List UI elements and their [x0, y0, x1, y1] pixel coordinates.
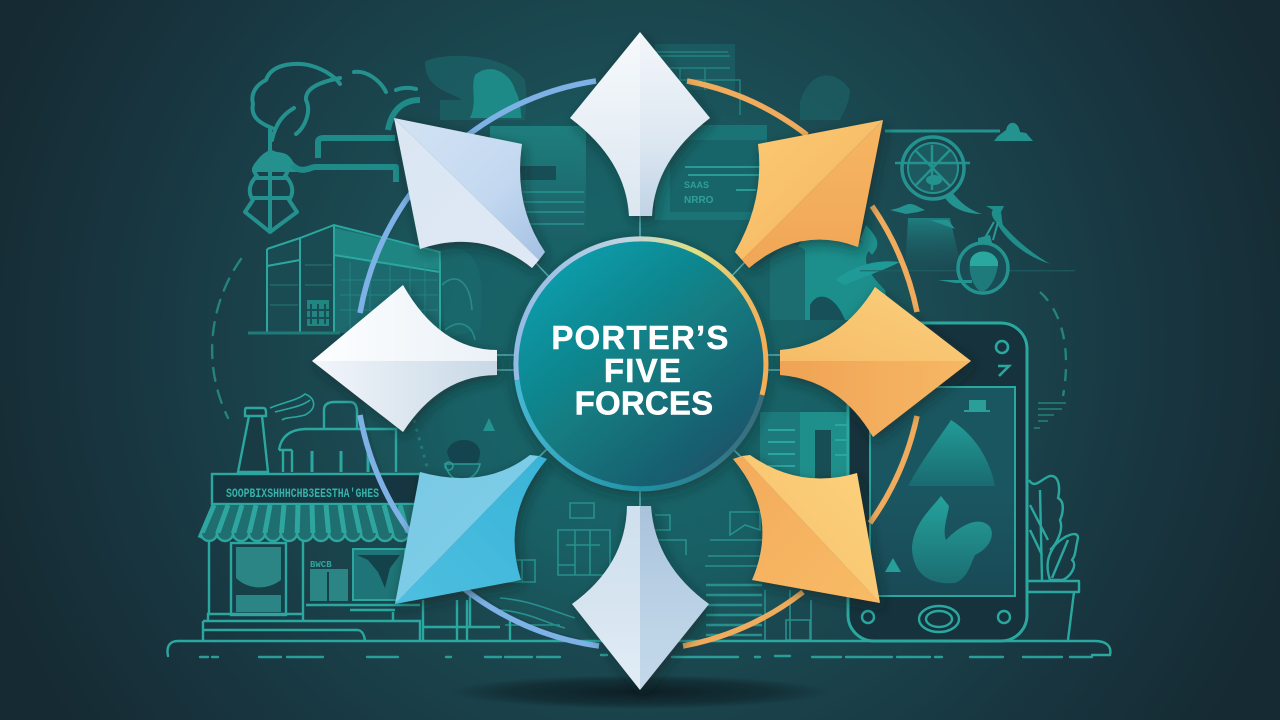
illustration: inner collage panels: SAAS	[684, 180, 709, 190]
hub title	[551, 319, 730, 422]
sign lettering: SOOPBIXSHHHCHB3EESTHA'GHES	[226, 487, 379, 501]
illustration: gear emblem and skyline line	[885, 123, 1033, 214]
illustration: masked person	[414, 418, 495, 480]
hub title: FORCES	[575, 384, 713, 422]
outer ring: blue arcs	[360, 81, 599, 646]
arrow: upper right	[735, 120, 883, 268]
central hub circle	[516, 237, 766, 489]
screen triangle	[885, 558, 901, 572]
illustration: top silhouette blob	[425, 56, 526, 120]
illustration: podium figure	[860, 204, 1080, 271]
ring interior disc	[361, 79, 919, 645]
illustration: factory pipes	[292, 100, 420, 182]
illustration: right building block	[760, 412, 858, 500]
illustration: storefront	[200, 394, 510, 641]
steps and base	[203, 592, 510, 641]
factory dome	[270, 394, 396, 472]
illustration: right dashed arc	[1040, 292, 1066, 396]
illustration: speed lines	[1034, 403, 1066, 428]
ground line	[167, 641, 1110, 656]
screen mountain	[908, 420, 995, 486]
shop window	[310, 549, 405, 602]
phone home button	[862, 606, 1010, 632]
illustration: lower left devices	[500, 560, 575, 628]
screen small icon	[964, 400, 990, 412]
illustration: inner collage panels: NRRO	[684, 195, 714, 206]
illustration: potted plant	[1028, 476, 1079, 640]
factory chimney	[238, 408, 268, 472]
illustration: office building	[248, 225, 440, 333]
ground dashes	[200, 655, 1092, 657]
hub title: PORTER’S	[551, 319, 730, 356]
illustration: factory cloud and pipes	[245, 64, 416, 232]
shop sign	[212, 474, 420, 504]
phone top icons	[996, 341, 1009, 376]
connector lines	[497, 216, 780, 506]
arrow: right	[780, 287, 971, 437]
outer ring: orange arcs	[683, 81, 917, 646]
arrow: left	[312, 285, 497, 432]
illustration: lower centre books and documents	[558, 503, 811, 640]
arrow: top	[570, 32, 710, 216]
silhouette highlight	[470, 69, 522, 118]
illustration: inner collage panels	[440, 44, 900, 340]
phone screen	[870, 387, 1015, 596]
arrow: lower right	[733, 455, 880, 603]
arrow: upper left	[394, 118, 545, 268]
factory tree joint	[252, 150, 300, 172]
awning	[200, 505, 416, 541]
illustration: smartphone	[848, 323, 1027, 641]
screen swoosh	[912, 496, 992, 583]
arrow: bottom	[572, 506, 709, 690]
door and columns	[209, 540, 303, 615]
illustration: left dashed arc	[212, 259, 241, 418]
floor shadow	[450, 675, 830, 709]
illustration: pendulum emblem	[938, 206, 1050, 293]
arrow: lower left	[395, 455, 547, 604]
hub title: FIVE	[604, 352, 682, 389]
shop window: BWCB	[310, 560, 332, 570]
